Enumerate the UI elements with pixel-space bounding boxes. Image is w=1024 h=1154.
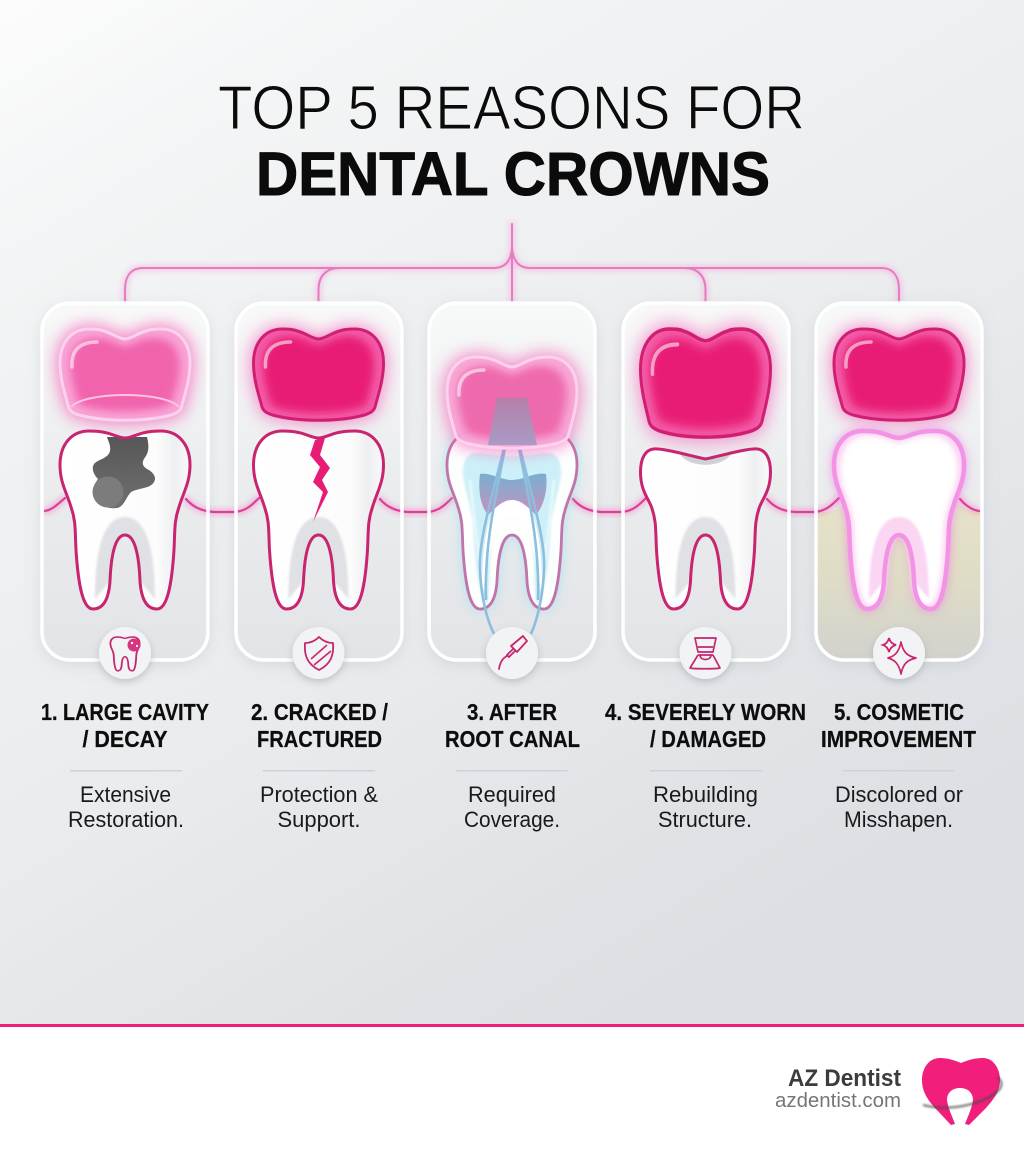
reason 5 text: Discolored or (835, 782, 963, 807)
panel: cracked tooth (254, 329, 384, 609)
reason 2 text: FRACTURED (257, 726, 382, 752)
reason 4 text: / DAMAGED (650, 726, 766, 752)
panel: large cavity (60, 329, 190, 609)
icon: shield (292, 627, 344, 679)
brand text: azdentist.com (775, 1090, 901, 1112)
icon: dental worker (680, 627, 732, 679)
reason 4 text: Structure. (658, 807, 752, 832)
reason 3 text: Required (468, 782, 556, 807)
tooth with decay (60, 431, 190, 609)
reason 2 text (251, 699, 389, 832)
reason 2 text: Protection & (260, 782, 378, 807)
reason 3 text: Coverage. (464, 807, 560, 832)
footer (0, 1024, 1024, 1154)
card backgrounds (42, 303, 982, 660)
brand text: AZ Dentist (788, 1065, 901, 1092)
panel: cosmetic (834, 329, 964, 609)
reason 1 text: 1. LARGE CAVITY (41, 699, 209, 725)
solid crown (834, 329, 964, 420)
reason 1 text: Restoration. (68, 807, 184, 832)
logo (922, 1058, 1001, 1125)
reason 5 text: IMPROVEMENT (821, 726, 976, 752)
title: DENTAL CROWNS (256, 140, 770, 208)
worn tooth (640, 449, 770, 609)
translucent crown (60, 329, 190, 420)
icon: endodontic file (486, 627, 538, 679)
solid crown (640, 329, 770, 437)
solid crown (254, 329, 384, 420)
panel: root canal (447, 357, 577, 634)
card borders (42, 303, 982, 660)
tooth with crack (254, 431, 384, 609)
whitened glowing tooth (834, 431, 964, 609)
reason 5 text: 5. COSMETIC (834, 699, 964, 725)
reason 1 text: Extensive (80, 782, 171, 807)
reason 5 text: Misshapen. (844, 807, 953, 832)
panel: worn tooth (640, 329, 770, 609)
reason 3 text: ROOT CANAL (445, 726, 580, 752)
gum line (45, 498, 979, 512)
title: TOP 5 REASONS FOR (218, 74, 805, 143)
reason 4 text: Rebuilding (653, 782, 758, 807)
translucent crown with post (447, 357, 577, 448)
title (218, 74, 805, 208)
icon: tooth decay (99, 627, 151, 679)
reason 2 text: 2. CRACKED / (251, 699, 389, 725)
reason 1 text (41, 699, 209, 832)
brand text (775, 1065, 901, 1112)
tooth with canals (447, 431, 577, 634)
reason 2 text: Support. (278, 807, 360, 832)
reason 5 text (821, 699, 976, 832)
reason 4 text: 4. SEVERELY WORN (605, 699, 806, 725)
card 5 gum tint (816, 498, 982, 660)
reason 3 text: 3. AFTER (467, 699, 557, 725)
reason 4 text (605, 699, 806, 832)
reason 3 text (445, 699, 580, 832)
icon: sparkle (873, 627, 925, 679)
reason 1 text: / DECAY (82, 726, 168, 752)
connector tree (125, 224, 899, 304)
